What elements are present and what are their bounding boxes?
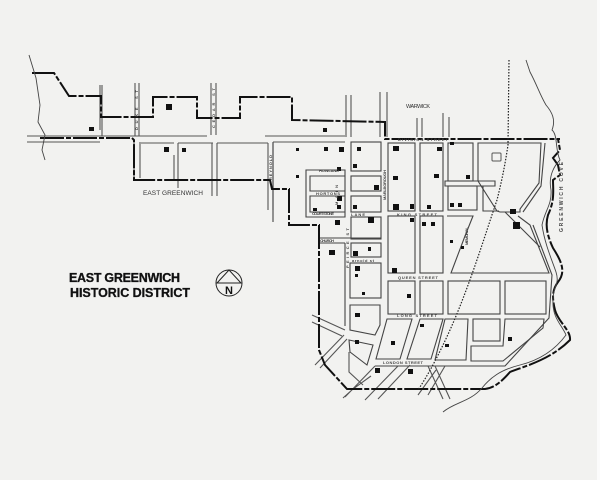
district boundary — [32, 73, 570, 389]
street labels: DUKE ST — [134, 89, 139, 130]
railroad — [418, 60, 509, 390]
street labels — [134, 87, 565, 365]
street labels: WARWICK — [406, 104, 430, 110]
eastern blocks — [375, 143, 552, 366]
street labels: HOWLAND — [319, 168, 339, 173]
street labels: LANE — [351, 212, 365, 217]
street labels: COURT STONE — [312, 211, 334, 216]
school marker — [492, 153, 501, 161]
street labels: CEDAR ST — [211, 87, 216, 128]
street labels: REYNOLD — [268, 155, 273, 180]
title: EAST GREENWICH — [69, 271, 180, 285]
street labels: QUEEN STREET — [398, 275, 439, 280]
street labels: MARLBOROUGH — [382, 170, 387, 200]
icon: north arrow: N — [225, 285, 233, 297]
street labels: HORTONS — [316, 191, 340, 196]
title: HISTORIC DISTRICT — [70, 286, 190, 300]
street labels: KING STREET — [397, 212, 438, 217]
street labels: GREENWICH COVE — [559, 161, 565, 232]
street labels: LONDON STREET — [383, 360, 424, 365]
street labels: EAST GREENWICH — [143, 190, 203, 197]
street labels: PEIRCE ST — [345, 227, 350, 268]
street labels: MAIN — [334, 185, 339, 205]
title — [69, 271, 190, 300]
street labels: MEMORIAL — [464, 226, 469, 245]
southern blocks — [312, 315, 468, 400]
street labels: arnold st — [352, 258, 375, 263]
west streets — [27, 83, 449, 210]
street labels: LONG STREET — [397, 313, 438, 318]
icon: north arrow — [216, 270, 242, 297]
street labels: DIVISION STREET — [398, 137, 449, 142]
street labels: CHURCH — [320, 238, 334, 243]
river — [29, 55, 566, 412]
central blocks — [273, 142, 443, 365]
historic buildings — [89, 104, 520, 374]
